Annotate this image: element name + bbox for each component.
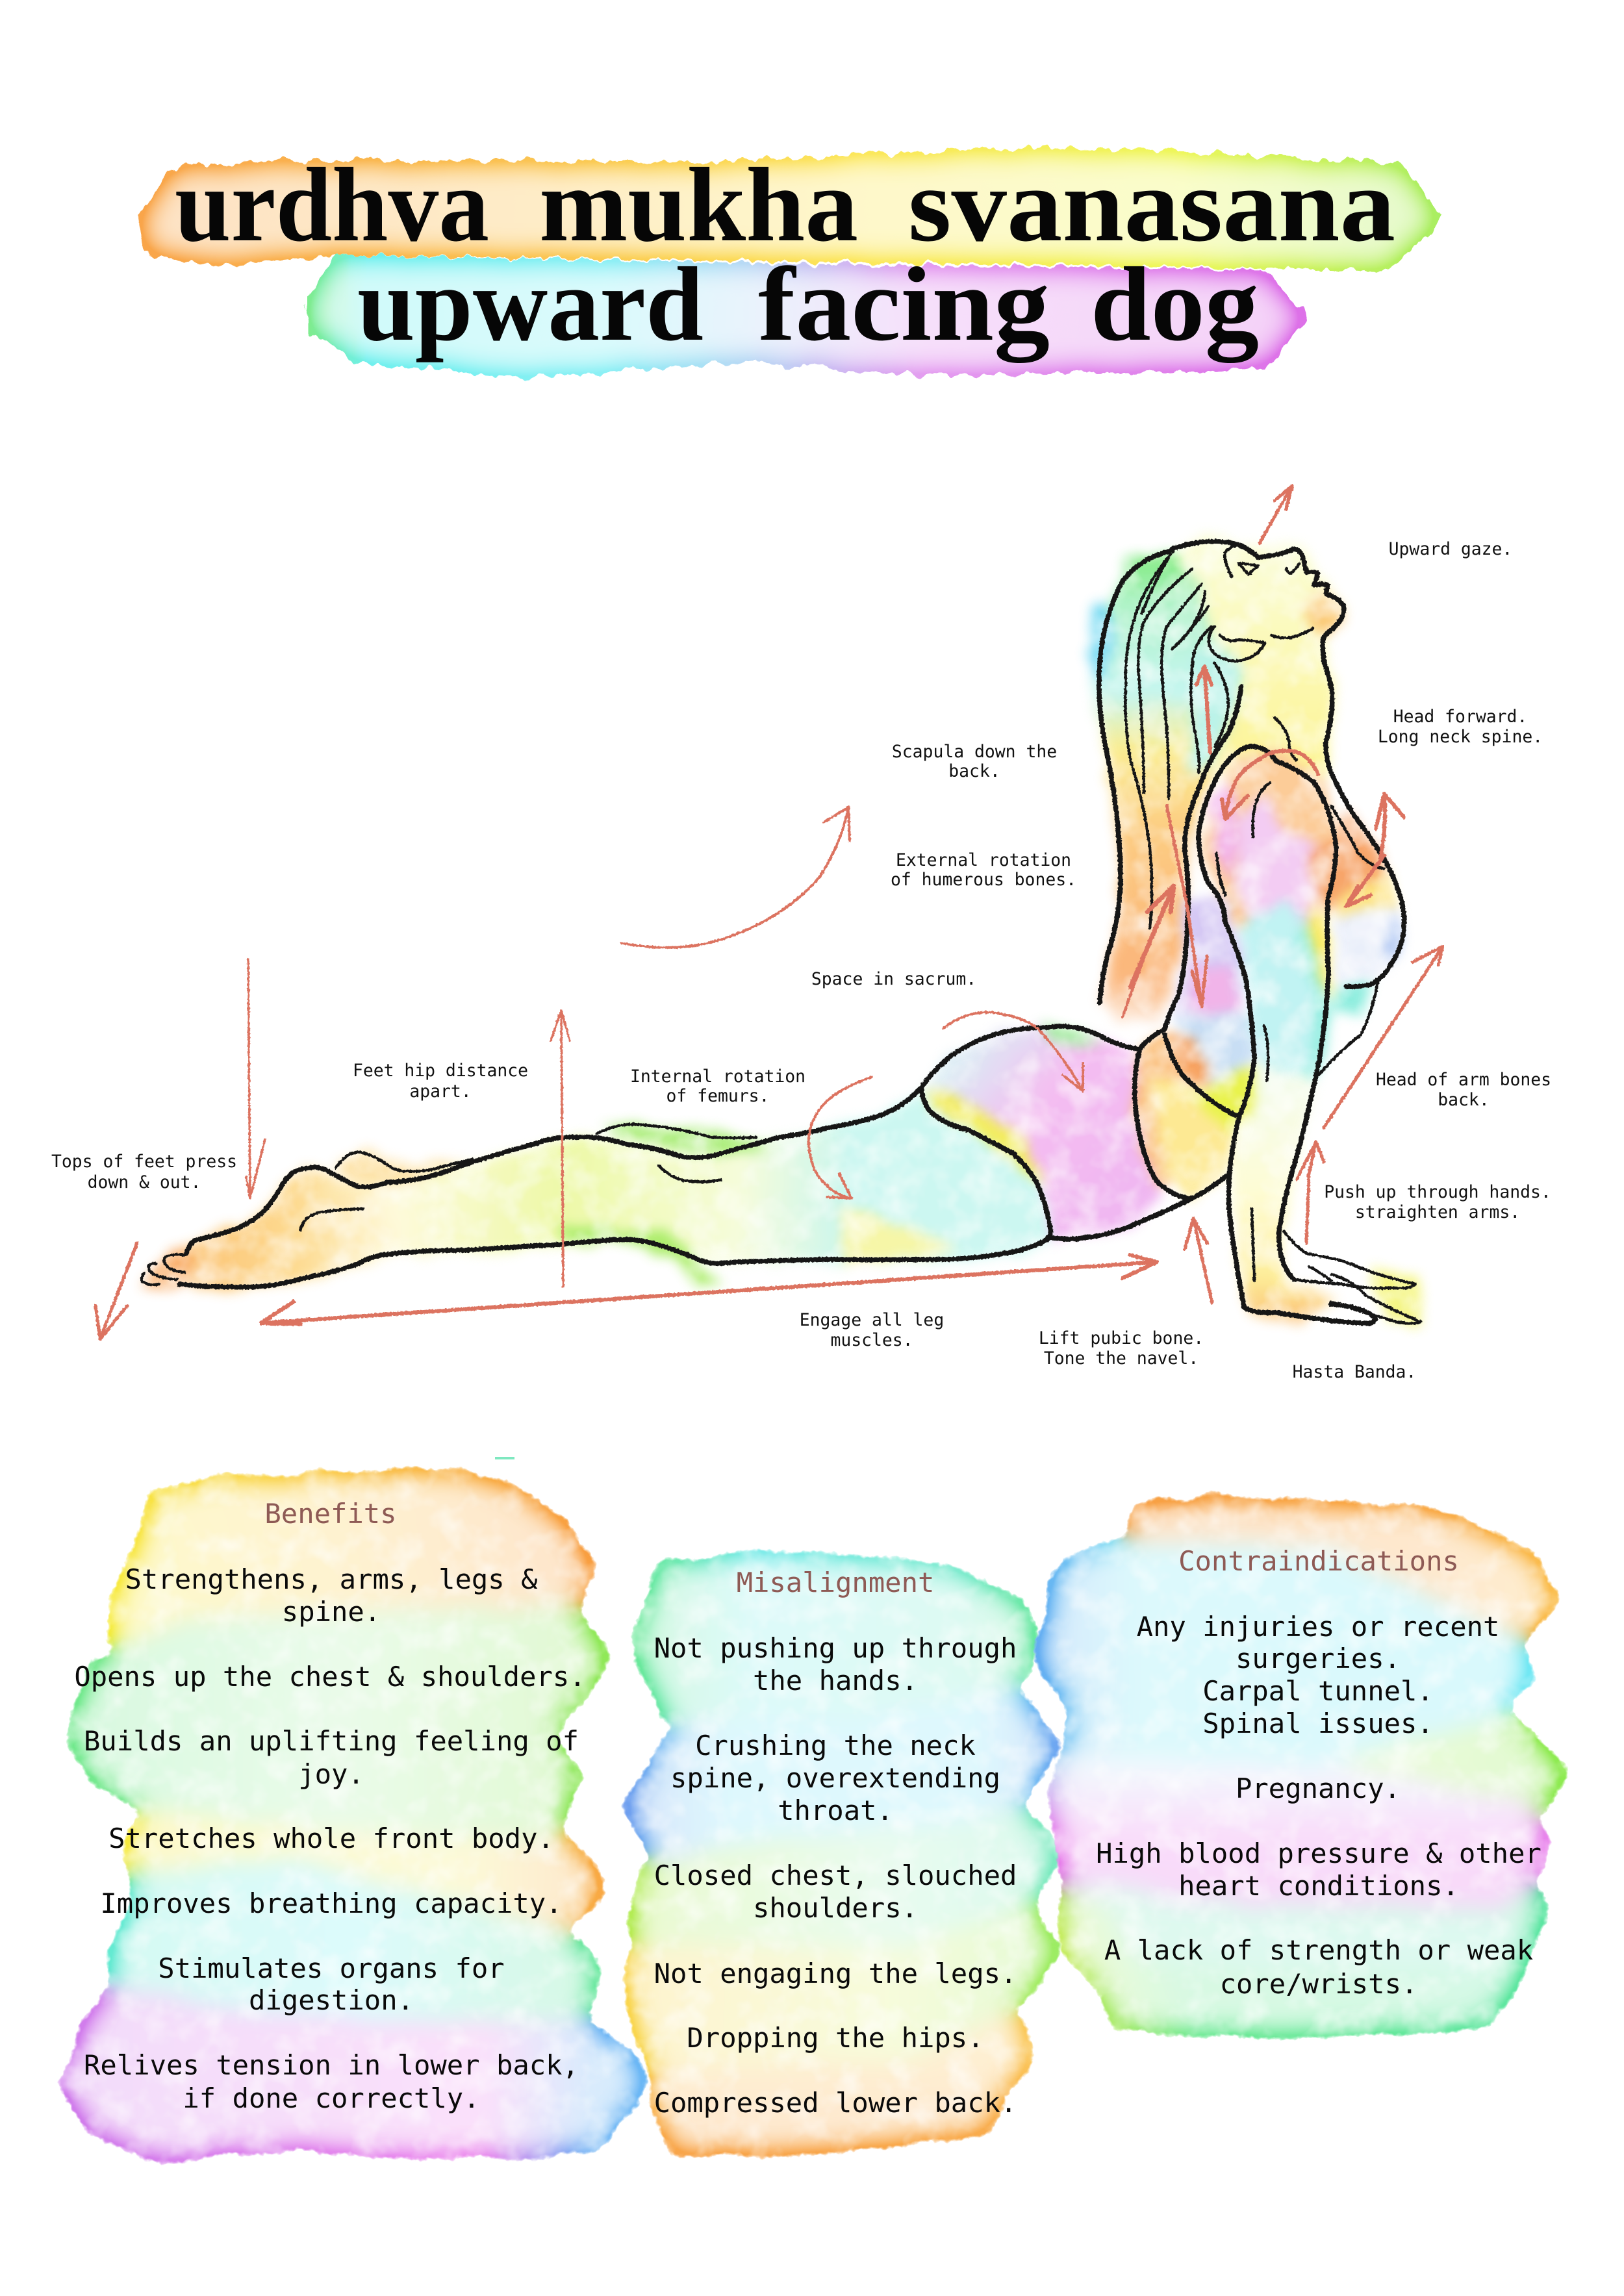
arrow: push up through hands xyxy=(1297,1142,1324,1243)
contraindications list: Any injuries or recent xyxy=(1137,1611,1499,1643)
arrow: up along arm xyxy=(1130,886,1174,987)
label: upward gaze: Upward gaze. xyxy=(1389,539,1512,559)
contraindications list xyxy=(1096,1611,1542,2000)
benefits list: Relives tension in lower back, xyxy=(84,2049,579,2081)
arrow: chest down xyxy=(1346,855,1384,907)
misalignment list: Not engaging the legs. xyxy=(654,1958,1017,1989)
panel: misalignment xyxy=(619,1550,1065,2160)
title second line: facing xyxy=(758,246,1050,363)
label: lift pubic bone: Tone the navel. xyxy=(1044,1348,1199,1369)
arrow: head of arm bones back xyxy=(1324,946,1443,1128)
arrow: external rotation of shoulder xyxy=(1222,751,1318,819)
label: internal rotation: Internal rotation xyxy=(630,1066,806,1087)
arrow: internal rotation of femurs xyxy=(809,1077,872,1198)
benefits list xyxy=(74,1563,586,2114)
misalignment list: Dropping the hips. xyxy=(687,2022,984,2054)
underside of leg outline xyxy=(179,1088,1051,1287)
arrow: space in sacrum xyxy=(943,1012,1083,1091)
arrow: upward gaze xyxy=(1260,486,1292,543)
label: feet hip distance: Feet hip distance xyxy=(353,1061,528,1081)
contraindications list: heart conditions. xyxy=(1178,1870,1459,1902)
benefits list: Strengthens, arms, legs & xyxy=(125,1563,538,1595)
label: head forward: Long neck spine. xyxy=(1378,727,1543,747)
label: lift pubic bone: Lift pubic bone. xyxy=(1039,1328,1204,1348)
figure ink outlines xyxy=(142,542,1421,1324)
title second line: dog xyxy=(1091,246,1259,363)
benefits heading: Benefits xyxy=(264,1498,397,1530)
contraindications watercolour background xyxy=(1035,1495,1570,2038)
second leg, foot and toes xyxy=(142,1124,756,1285)
hand lines xyxy=(1284,1231,1421,1324)
label: external rotation: External rotation xyxy=(896,850,1071,870)
label: engage leg muscles: muscles. xyxy=(830,1330,913,1350)
benefits list: Builds an uplifting feeling of xyxy=(84,1725,579,1757)
title xyxy=(138,146,1441,379)
label: head forward: Head forward. xyxy=(1393,707,1527,727)
label: engage leg muscles: Engage all leg xyxy=(800,1310,944,1330)
misalignment list: Closed chest, slouched xyxy=(654,1860,1017,1891)
contraindications list: A lack of strength or weak xyxy=(1104,1934,1533,1966)
contraindications list: Carpal tunnel. xyxy=(1202,1675,1434,1707)
misalignment watercolour background xyxy=(619,1550,1065,2160)
title second line xyxy=(357,246,1259,363)
arrow: lower back line up xyxy=(1123,942,1150,1017)
label: hasta banda: Hasta Banda. xyxy=(1293,1362,1416,1382)
contraindications list: High blood pressure & other xyxy=(1096,1837,1542,1869)
back and shoulder lines xyxy=(1165,687,1384,1324)
misalignment list: spine, overextending xyxy=(670,1762,1000,1794)
contraindications list: surgeries. xyxy=(1236,1643,1401,1674)
label: push up: Push up through hands. xyxy=(1324,1182,1551,1202)
misalignment list: throat. xyxy=(778,1795,893,1826)
contraindications list: core/wrists. xyxy=(1220,1968,1417,2000)
label: tops of feet: down & out. xyxy=(88,1172,201,1192)
title first line: mukha xyxy=(539,147,858,264)
contraindications list: Spinal issues. xyxy=(1202,1708,1434,1739)
benefits watercolour background xyxy=(57,1469,650,2162)
misalignment list: shoulders. xyxy=(753,1892,918,1924)
face details xyxy=(1209,546,1313,760)
title band: orange to green wash xyxy=(138,146,1441,271)
misalignment list: Compressed lower back. xyxy=(654,2087,1017,2119)
arrow: lift pubic bone xyxy=(1185,1218,1212,1303)
label: push up: straighten arms. xyxy=(1355,1202,1520,1222)
arrow: scapula down the back xyxy=(1167,805,1207,1007)
benefits list: Stimulates organs for xyxy=(158,1952,505,1984)
benefits list: if done correctly. xyxy=(183,2082,480,2114)
arrow: large sweep to scapula xyxy=(622,807,850,948)
benefits list: joy. xyxy=(298,1758,364,1790)
label: head of arm bones: Head of arm bones xyxy=(1376,1070,1551,1090)
title second line: upward xyxy=(357,246,704,363)
label: scapula: back. xyxy=(948,761,1000,781)
arrow: tops of feet down and out xyxy=(95,1243,137,1339)
label: external rotation: of humerous bones. xyxy=(891,870,1076,890)
benefits list: Improves breathing capacity. xyxy=(100,1887,563,1919)
hair outlines xyxy=(1099,551,1228,1003)
figure: yoga pose illustration xyxy=(51,486,1551,1382)
contraindications list: Pregnancy. xyxy=(1236,1772,1401,1804)
benefits list: Opens up the chest & shoulders. xyxy=(74,1661,586,1693)
contraindications heading: Contraindications xyxy=(1178,1545,1459,1577)
misalignment list xyxy=(654,1632,1017,2119)
top of leg and glute outline xyxy=(186,1026,1137,1254)
arrow: long vertical up at knee xyxy=(551,1010,570,1287)
label: feet hip distance: apart. xyxy=(409,1081,472,1102)
misalignment list: the hands. xyxy=(753,1665,918,1697)
misalignment list: Crushing the neck xyxy=(695,1730,976,1761)
head and front body outline xyxy=(1172,542,1404,987)
waist and hip lines xyxy=(1048,1029,1239,1239)
misalignment list: Not pushing up through xyxy=(654,1632,1017,1664)
title first line xyxy=(175,147,1395,264)
label: internal rotation: of femurs. xyxy=(666,1086,769,1106)
watercolour body fill xyxy=(138,536,1423,1325)
arrow: feet hip distance vertical down xyxy=(246,959,265,1198)
panel: contraindications xyxy=(1035,1495,1570,2038)
arrow: chest up xyxy=(1376,794,1404,859)
label: tops of feet: Tops of feet press xyxy=(51,1152,237,1172)
label: head of arm bones: back. xyxy=(1438,1090,1490,1110)
title first line: svanasana xyxy=(908,147,1395,264)
benefits list: spine. xyxy=(282,1596,381,1628)
title first line: urdhva xyxy=(175,147,489,264)
label: sacrum: Space in sacrum. xyxy=(811,969,976,989)
arrow: neck spine up xyxy=(1197,666,1212,753)
label: scapula: Scapula down the xyxy=(892,742,1057,762)
title band: cyan to magenta wash xyxy=(307,255,1304,379)
alignment arrows xyxy=(95,486,1443,1339)
benefits list: Stretches whole front body. xyxy=(108,1823,554,1854)
decorative speck xyxy=(495,1457,514,1459)
benefits list: digestion. xyxy=(249,1984,414,2016)
arrow: engage leg muscles double headed xyxy=(261,1255,1157,1324)
labels xyxy=(51,539,1551,1382)
panel: benefits xyxy=(57,1469,650,2162)
misalignment heading: Misalignment xyxy=(737,1567,934,1598)
